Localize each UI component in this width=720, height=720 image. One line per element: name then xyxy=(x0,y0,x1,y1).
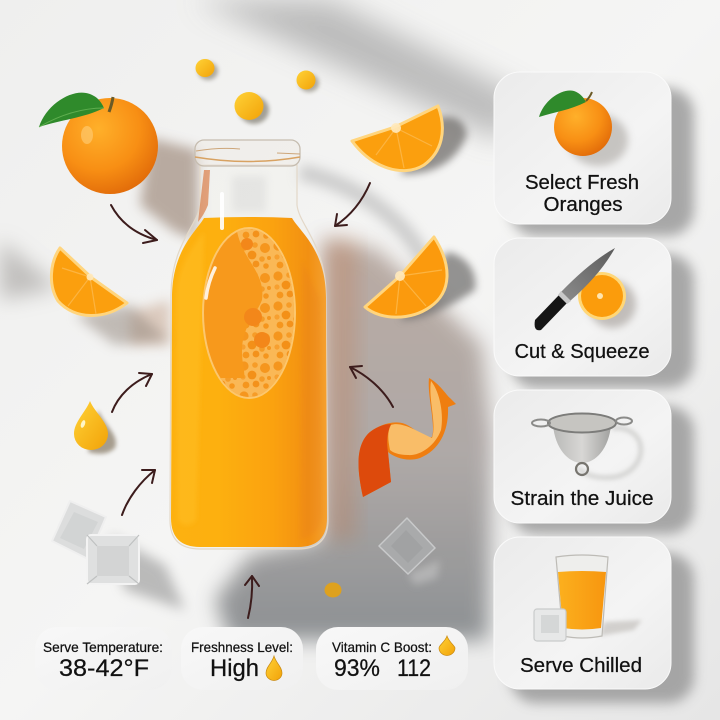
stat: freshness level: Freshness Level: xyxy=(191,639,293,655)
bottle rim xyxy=(195,140,300,166)
stat: vitamin c boost xyxy=(316,627,468,690)
panel shadows xyxy=(510,88,694,703)
arrow: ice to bottle xyxy=(122,470,155,515)
orange peel xyxy=(359,378,456,497)
ice cubes left xyxy=(52,501,185,610)
orange slice left xyxy=(51,248,168,345)
icon: glass of juice xyxy=(556,555,642,638)
icon: orange slice xyxy=(578,272,636,328)
ice cube back xyxy=(52,501,106,559)
stat: freshness level: High xyxy=(210,655,259,682)
arrow: peel to bottle xyxy=(350,366,393,407)
arrow: orange to bottle xyxy=(111,205,157,243)
stat: vitamin c boost: 112 xyxy=(397,655,431,682)
juice droplet bottom xyxy=(324,582,342,598)
step label: Oranges xyxy=(544,194,622,216)
large juice drop xyxy=(74,401,116,454)
stat: freshness level xyxy=(181,627,303,690)
leaf xyxy=(39,93,104,127)
orange slice right xyxy=(365,237,475,320)
arrow: slice to bottle xyxy=(335,183,370,226)
juice droplet top center xyxy=(234,92,269,124)
stat: serve temperature: 38-42°F xyxy=(59,655,149,682)
stat: serve temperature xyxy=(35,627,172,690)
panel: cut and squeeze xyxy=(494,238,671,376)
step label: Select Fresh xyxy=(525,172,639,194)
step label: Strain the Juice xyxy=(510,488,654,510)
step label xyxy=(525,172,639,216)
panel: select fresh oranges xyxy=(494,72,671,224)
stat: vitamin c boost: Vitamin C Boost: xyxy=(332,639,432,655)
ice cube right xyxy=(379,518,440,585)
orange slice top right xyxy=(352,106,467,174)
step label: Serve Chilled xyxy=(520,655,642,677)
icon: orange with leaf xyxy=(539,91,628,166)
juice fill xyxy=(171,217,327,547)
icon: drop xyxy=(439,636,455,656)
icon: ice cube xyxy=(534,609,566,641)
arrow: drop to bottle xyxy=(112,373,152,412)
stat: serve temperature: Serve Temperature: xyxy=(43,639,163,655)
arrow: bottom to bottle xyxy=(245,576,259,618)
icon: strainer xyxy=(532,414,641,478)
panel: serve chilled xyxy=(494,537,671,689)
bottle of orange juice xyxy=(170,140,328,549)
ice cube front xyxy=(87,535,139,584)
stat: vitamin c boost: 93% xyxy=(334,655,380,682)
orange with leaf xyxy=(39,93,158,194)
icon: knife xyxy=(535,248,615,330)
juice droplet top right xyxy=(296,70,319,92)
icon: drop xyxy=(266,656,282,680)
foam ellipse xyxy=(202,225,300,400)
juice droplet top left xyxy=(196,59,218,80)
panel: strain the juice xyxy=(494,390,671,523)
step label: Cut & Squeeze xyxy=(514,341,650,363)
